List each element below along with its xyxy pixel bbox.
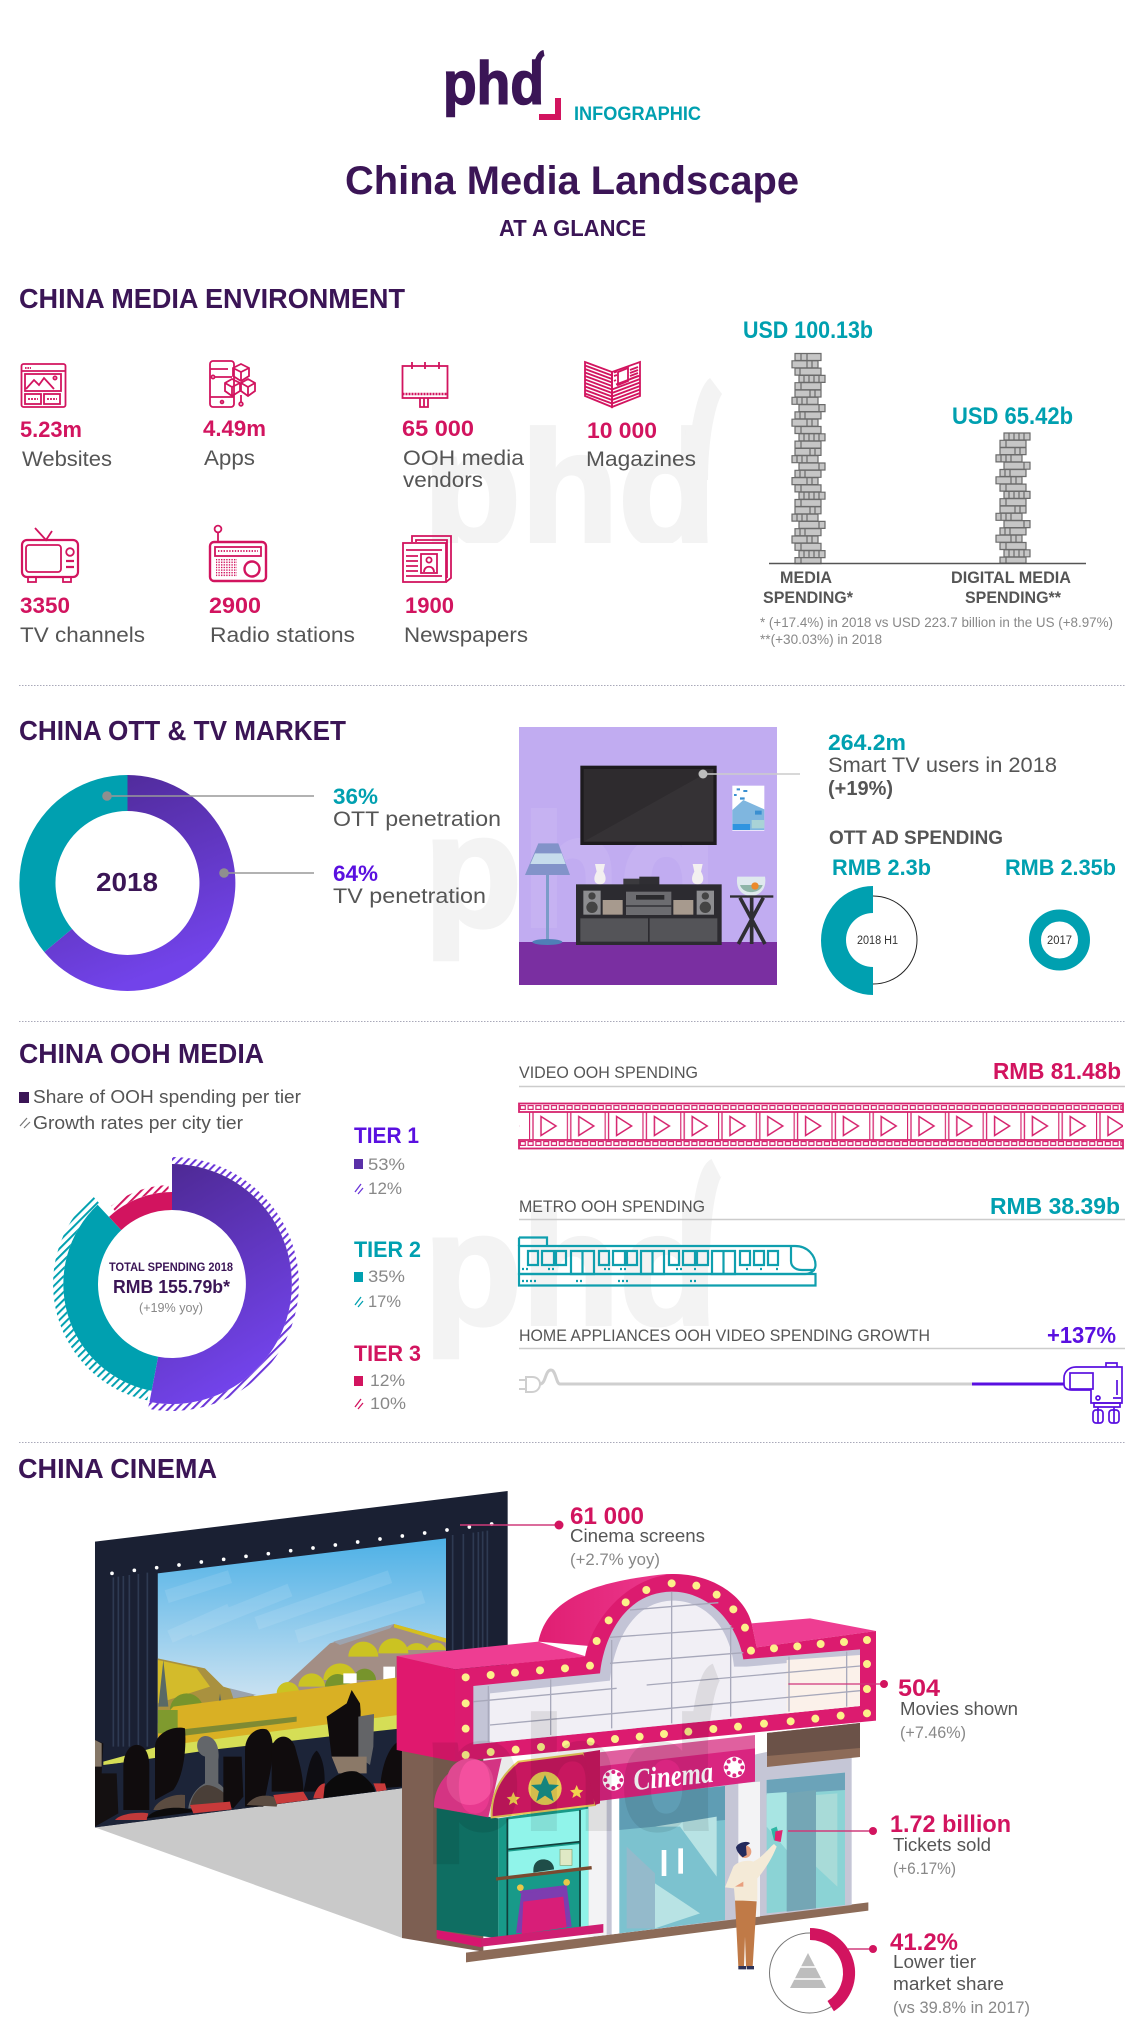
icon: train (519, 1238, 816, 1286)
callout: cinema screens: 61 000 (570, 1503, 644, 1530)
stat: tv penetration: 64% (333, 861, 378, 886)
stat: tv penetration: TV penetration (333, 885, 486, 908)
heading: ott ad spending: OTT AD SPENDING (829, 828, 1003, 849)
callout: lower tier market share: Lower tier (893, 1952, 976, 1972)
row: video ooh spending: RMB 81.48b (993, 1058, 1121, 1084)
stat: ott penetration: 36% (333, 784, 378, 809)
brown band dark (767, 1723, 860, 1756)
legend: tier 3 (354, 1341, 421, 1413)
booth (437, 1805, 603, 1947)
donut center text: RMB 155.79b* (113, 1277, 230, 1297)
icon: mixer (972, 1363, 1122, 1423)
donut: 2017 (1035, 916, 1084, 964)
stat: ott penetration: OTT penetration (333, 808, 501, 831)
icon: billboard (402, 362, 448, 407)
seating area (95, 1728, 402, 1827)
watermark: phd (423, 398, 716, 577)
marquee lights (466, 1583, 867, 1755)
watermark: phd (424, 1179, 717, 1358)
legend: tier 3: TIER 3 (354, 1341, 421, 1366)
callout: lower tier market share: 41.2% (890, 1929, 958, 1956)
stat: ooh media vendors: 65 000 (402, 416, 474, 441)
callout: cinema screens: (+2.7% yoy) (570, 1550, 660, 1569)
icon: film strip (519, 1104, 1123, 1148)
chart: media spending stacks (743, 317, 1113, 647)
callout: tickets sold (788, 1811, 1011, 1878)
lamp (525, 843, 570, 945)
panel: header (345, 50, 799, 241)
callout: tickets sold: 1.72 billion (890, 1811, 1011, 1838)
row: video ooh spending: VIDEO OOH SPENDING (519, 1063, 698, 1082)
donut year: 2018 (96, 867, 158, 897)
leader: tv (219, 868, 314, 878)
bar: media spending bricks (792, 354, 825, 564)
legend: tier 3: 12% (370, 1371, 405, 1390)
stat: tv penetration (333, 861, 486, 908)
row: video ooh spending (519, 1058, 1125, 1148)
watermark (432, 378, 722, 543)
stat: smart tv users (828, 730, 1057, 800)
callout: movies shown: 504 (898, 1675, 941, 1702)
stat: rmb 2.3b: RMB 2.3b (832, 855, 931, 880)
callout: cinema screens (460, 1503, 705, 1569)
stat: smart tv users: 264.2m (828, 730, 906, 755)
footnotes (760, 614, 1113, 647)
logo tag: INFOGRAPHIC (574, 104, 701, 125)
brown band top right (767, 1723, 860, 1767)
callout: tickets sold: (+6.17%) (893, 1859, 956, 1878)
donut: 2017: 2017 (1047, 935, 1072, 947)
illustration: living room: phd (424, 781, 717, 960)
stat: radio stations: Radio stations (210, 624, 355, 647)
value: media spending: USD 100.13b (743, 317, 873, 344)
axis label: media spending (763, 568, 853, 607)
stat: tv channels (20, 593, 145, 647)
donut center text (109, 1262, 234, 1315)
logo: phd: phd (443, 50, 544, 117)
panel: china media environment (19, 283, 1113, 647)
movie screen (157, 1537, 450, 1753)
person (725, 1827, 783, 1969)
footnotes: **(+30.03%) in 2018 (760, 631, 882, 647)
sign upper band (590, 1735, 755, 1768)
callout: cinema screens: Cinema screens (570, 1526, 705, 1546)
icon: websites (22, 364, 66, 407)
marquee body (397, 1574, 884, 1762)
heading: CHINA OTT & TV MARKET (19, 715, 346, 746)
value: digital media spending: USD 65.42b (952, 403, 1073, 430)
stat: ooh media vendors: OOH media (403, 447, 524, 470)
half donut: 2018 h1 (821, 886, 917, 995)
heading: CHINA OOH MEDIA (19, 1038, 264, 1069)
stat: ott penetration (333, 784, 501, 831)
panel: china cinema (18, 1453, 1030, 2017)
row: home appliances: HOME APPLIANCES OOH VIDEO SPENDING GROWTH (519, 1326, 930, 1345)
legend: tier 2: 35% (368, 1267, 405, 1286)
stat: rmb 2.35b: RMB 2.35b (1005, 855, 1116, 880)
icon: plug and cable (519, 1370, 972, 1392)
leader: smart tv (698, 770, 800, 778)
stat: magazines: Magazines (586, 448, 696, 471)
booth awning (434, 1750, 600, 1817)
donut center text: (+19% yoy) (139, 1300, 203, 1315)
stat: apps: 4.49m (203, 416, 266, 441)
floor (95, 1788, 403, 1938)
brown wall (402, 1747, 483, 1952)
legend: tier 2: 17% (368, 1292, 401, 1311)
lime field (103, 1712, 423, 1765)
legend: tier 2 (354, 1237, 421, 1311)
sign: Cinema (632, 1755, 715, 1797)
donut center text: TOTAL SPENDING 2018 (109, 1262, 234, 1274)
donut chart: penetration (19, 775, 235, 991)
stat: newspapers: 1900 (405, 593, 454, 618)
fish bowl and table (730, 877, 773, 944)
vases (594, 864, 703, 884)
icon: market share ring (770, 1928, 855, 2013)
legend (19, 1087, 301, 1133)
media console (576, 877, 722, 945)
footnotes: * (+17.4%) in 2018 vs USD 223.7 billion in the US (+8.97%) (760, 614, 1113, 630)
stat: apps (203, 416, 266, 470)
watermark over building: phd (424, 1684, 717, 1863)
callout: lower tier market share: (vs 39.8% in 2017) (893, 1998, 1030, 2017)
icon: radio (210, 526, 266, 581)
stat: smart tv users: Smart TV users in 2018 (828, 754, 1057, 777)
illustration: living room (519, 727, 777, 985)
subtitle: AT A GLANCE (499, 215, 646, 241)
glass door (619, 1786, 725, 1933)
callout: tickets sold: Tickets sold (893, 1835, 991, 1855)
bar: digital media spending bricks (996, 433, 1030, 563)
glass right (767, 1773, 845, 1913)
stat: newspapers (404, 593, 528, 647)
legend: Share of OOH spending per tier (33, 1087, 301, 1107)
pavement strip (466, 1902, 868, 1962)
callout: movies shown (880, 1675, 1018, 1742)
tv screen (580, 766, 717, 845)
stage wall (95, 1491, 508, 1827)
poster (732, 786, 764, 831)
axis label: media spending: SPENDING* (763, 588, 853, 607)
leader: ott (102, 791, 314, 801)
stat: websites: 5.23m (20, 417, 82, 442)
row: home appliances (519, 1322, 1125, 1423)
axis label: digital media spending (951, 568, 1071, 607)
legend: tier 1: TIER 1 (354, 1123, 419, 1148)
stat: apps: Apps (204, 447, 255, 470)
legend: tier 1 (354, 1123, 419, 1198)
illustration: cinema auditorium (95, 1491, 508, 1938)
audience (95, 1690, 402, 1827)
panel: china ott and tv market (19, 715, 1116, 995)
callout: movies shown: Movies shown (900, 1699, 1018, 1719)
stat: ooh media vendors: vendors (403, 469, 483, 492)
illustration: cinema building (397, 1574, 884, 1969)
heading: CHINA CINEMA (18, 1453, 217, 1484)
stat: magazines (586, 418, 696, 471)
white columns (588, 1782, 760, 1937)
building lower facade (402, 1733, 868, 1969)
stat: magazines: 10 000 (587, 418, 657, 443)
stat: tv channels: 3350 (20, 593, 70, 618)
title: China Media Landscape (345, 159, 799, 203)
spot lights (112, 1524, 492, 1573)
callout: lower tier market share: market share (893, 1974, 1004, 1994)
panel: china ooh media (19, 1038, 1125, 1423)
axis label: media spending: MEDIA (780, 568, 832, 587)
row: metro ooh spending: RMB 38.39b (990, 1193, 1120, 1219)
icon: magazine (585, 362, 640, 407)
axis (769, 562, 1086, 564)
back wall (593, 1733, 852, 1937)
curtains (113, 1531, 487, 1747)
legend: Growth rates per city tier (33, 1113, 243, 1133)
half donut: 2018 h1: 2018 H1 (857, 935, 898, 947)
stat: radio stations (209, 593, 355, 647)
row: metro ooh spending (519, 1193, 1125, 1286)
axis label: digital media spending: SPENDING** (965, 588, 1061, 607)
cinema sign and marquee (397, 1574, 884, 1802)
icon: tv (22, 528, 78, 582)
stat: smart tv users: (+19%) (828, 778, 893, 800)
row: home appliances: +137% (1047, 1322, 1116, 1348)
icon: newspaper (403, 536, 451, 582)
heading: CHINA MEDIA ENVIRONMENT (19, 283, 405, 314)
stat: newspapers: Newspapers (404, 624, 528, 647)
legend: tier 1: 53% (368, 1155, 405, 1174)
stat: websites (20, 417, 112, 471)
legend: tier 1: 12% (368, 1179, 402, 1198)
donut chart: tier share (53, 1157, 299, 1411)
icon: apps (210, 361, 255, 407)
stat: ooh media vendors (402, 416, 524, 492)
watermark: phd (424, 781, 717, 960)
legend: tier 2: TIER 2 (354, 1237, 421, 1262)
legend: tier 3: 10% (370, 1394, 406, 1413)
callout: movies shown: (+7.46%) (900, 1723, 966, 1742)
callout: lower tier market share (770, 1928, 1030, 2017)
axis label: digital media spending: DIGITAL MEDIA (951, 568, 1071, 587)
row: metro ooh spending: METRO OOH SPENDING (519, 1197, 705, 1216)
stat: tv channels: TV channels (20, 624, 145, 647)
stat: websites: Websites (22, 448, 112, 471)
sign (590, 1748, 755, 1802)
stat: radio stations: 2900 (209, 593, 261, 618)
room details at zoom scale (525, 766, 773, 945)
